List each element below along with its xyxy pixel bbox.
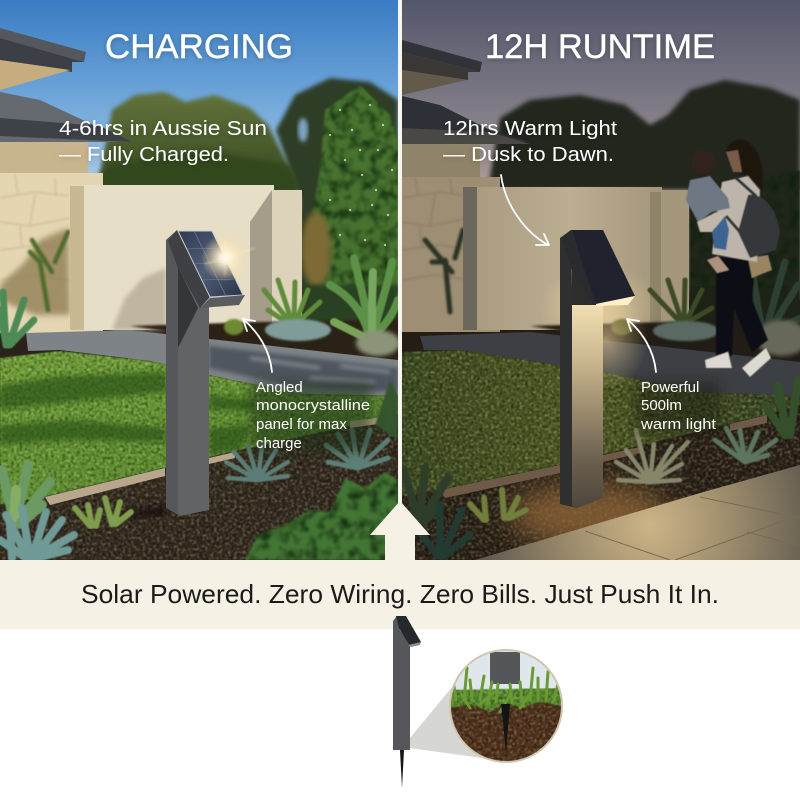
- lawn tree shadow bands: [0, 372, 255, 455]
- dusk post lit front: [572, 304, 603, 508]
- right mixed shrub: [356, 330, 400, 356]
- footpath: [26, 330, 398, 396]
- callout: panel description: Angled: [256, 379, 303, 396]
- warm glow beam: [564, 290, 648, 390]
- green ground shrub: [245, 472, 398, 560]
- path light dapples: [250, 358, 390, 382]
- mid hedge: [85, 150, 300, 190]
- silver plant: centre: [226, 446, 288, 480]
- text: runtime duration: — Dusk to Dawn.: [443, 144, 614, 166]
- inset grass blades: [453, 668, 558, 712]
- inset spike: [501, 704, 510, 752]
- dusk garden bed strip: [530, 318, 800, 365]
- child legs: [712, 216, 729, 250]
- child head: [691, 150, 715, 174]
- woman hair: [726, 140, 763, 190]
- callout: light description: Powerful: [641, 379, 699, 396]
- timber edging: [45, 418, 378, 505]
- callout: light description: 500lm: [641, 397, 682, 414]
- dusk mulch bed: [402, 405, 800, 560]
- fixture post front: [178, 268, 209, 516]
- fixture post left face: [166, 230, 180, 516]
- up arrow: [370, 501, 430, 561]
- dusk succulent: [470, 490, 526, 520]
- dusk stone joints: [402, 177, 470, 280]
- dusk bottom agave: [418, 505, 470, 556]
- ground spike: [400, 750, 404, 788]
- heading: charging: CHARGING: [105, 28, 293, 66]
- inset post: [490, 652, 520, 684]
- warm mulch glow: [510, 483, 670, 547]
- callout backing: [636, 382, 720, 432]
- shrub shadow on stone: [0, 228, 70, 315]
- dusk tree canopy: [488, 80, 800, 340]
- panel: runtime dusk scene: [402, 0, 800, 560]
- orange shrub: [301, 212, 331, 288]
- dusk silver low plant: [653, 321, 719, 341]
- small lamp solar head: [396, 616, 421, 646]
- small green plant: [224, 319, 244, 335]
- clump plant: [264, 280, 320, 322]
- left agave: [0, 292, 34, 345]
- rendered garden wall: [70, 185, 302, 330]
- stone wall: [0, 173, 103, 333]
- silver plant: right: [326, 430, 388, 468]
- bottom left silver agave: [0, 508, 74, 558]
- sky gap through tree: [298, 118, 308, 142]
- stone joints: [0, 175, 70, 280]
- panel: charging daytime scene: [0, 0, 400, 560]
- paved area: [475, 465, 800, 560]
- dusk sky: [402, 0, 800, 190]
- woman face: [726, 150, 742, 172]
- dusk silver plant: [715, 428, 776, 462]
- dusk hedge foliage: [689, 170, 800, 340]
- zoom cone: [410, 687, 482, 758]
- small product lamp: [393, 616, 421, 788]
- inset grass base: [450, 688, 562, 712]
- backpack strap: [726, 178, 756, 232]
- dusk house wall: [402, 142, 480, 182]
- succulent: [75, 498, 131, 526]
- dusk left agave: [404, 468, 448, 522]
- inset sky: [450, 650, 562, 690]
- inset ring: [449, 649, 563, 763]
- soft post shadow: [120, 505, 166, 518]
- tall dark tree: [273, 74, 398, 300]
- lit spiky plant: [616, 430, 688, 482]
- house roof lower: [0, 92, 132, 142]
- silver low plant: [265, 319, 331, 341]
- callout: panel description: monocrystalline: [256, 397, 370, 414]
- mulch bed: [0, 415, 398, 560]
- cream caption band: [0, 560, 800, 629]
- woman shoes: [705, 348, 771, 377]
- arrow: to fixture head: [501, 175, 549, 245]
- callout: panel description: panel for max: [256, 416, 347, 433]
- dusk timber edging: [440, 415, 767, 498]
- dusk garden wall: [463, 187, 689, 345]
- dusk post dark side: [560, 230, 577, 508]
- heading: 12h runtime: 12H RUNTIME: [485, 28, 715, 66]
- child body: [686, 176, 730, 222]
- solar panel: [178, 231, 243, 297]
- text: charging time: 4-6hrs in Aussie Sun: [59, 118, 267, 140]
- dusk lawn: [402, 350, 800, 497]
- woman torso: [712, 176, 760, 262]
- arrow: to solar panel: [243, 319, 272, 372]
- callout: panel description: charge: [256, 435, 302, 452]
- dusk roof upper: [402, 40, 482, 95]
- bottom left agave: [2, 465, 50, 524]
- sun flare on panel: [201, 234, 249, 282]
- shrub flower specks: [330, 105, 392, 245]
- dusk post upper face: [572, 268, 593, 305]
- child shoe: [707, 256, 729, 273]
- caption text: Solar Powered. Zero Wiring. Zero Bills. Just Push It In.: [81, 579, 719, 609]
- dusk ground base: [402, 300, 800, 560]
- soil and lawn base: [0, 300, 398, 560]
- path shadow dapples: [209, 346, 398, 392]
- dusk right edge plant: [765, 380, 798, 435]
- led light strip: [596, 296, 635, 306]
- text: runtime duration: 12hrs Warm Light: [443, 118, 617, 140]
- light fixture: runtime: [560, 230, 635, 508]
- dusk foliage behind plants: [689, 290, 800, 325]
- callout backing: [250, 382, 372, 450]
- inset: stake in soil: [449, 649, 563, 763]
- small dusk plant: [611, 319, 633, 335]
- fern by wall: [30, 232, 68, 310]
- sky: [0, 0, 398, 200]
- inset soil: [450, 698, 562, 762]
- flare rays: [205, 240, 255, 276]
- fixture head side: [168, 230, 210, 308]
- dusk fern by wall: [425, 230, 463, 312]
- cardigan tail: [748, 255, 772, 278]
- person carrying child: [686, 140, 780, 377]
- child trousers cream: [697, 212, 725, 232]
- small lamp post: [393, 616, 410, 750]
- foliage behind plants: [302, 285, 398, 325]
- flowering shrub: [312, 85, 398, 296]
- dusk solar panel: [571, 230, 635, 304]
- woman legs: [716, 257, 768, 356]
- small lamp strip: [408, 642, 421, 647]
- dusk mixed shrub: [756, 320, 800, 356]
- agave behind wall: [330, 258, 398, 336]
- distant tree canopy: [96, 92, 298, 195]
- right edge plant: [375, 380, 398, 440]
- paving joints: [585, 497, 800, 560]
- house wall: [0, 142, 88, 173]
- garden bed strip: [130, 319, 398, 346]
- arrow: to warm light: [627, 319, 656, 372]
- dusk stone wall: [402, 177, 500, 332]
- text: charging time: — Fully Charged.: [59, 144, 229, 166]
- dusk footpath: [420, 332, 800, 396]
- dusk roof lower: [402, 96, 530, 144]
- fixture head front: [200, 295, 245, 308]
- lawn: [0, 351, 398, 505]
- dusk head side: [561, 230, 597, 305]
- white divider: [398, 0, 402, 560]
- dusk agave: [742, 262, 800, 332]
- callout: light description: warm light: [640, 416, 717, 433]
- house roof upper: [0, 28, 86, 90]
- post shaded patch: [178, 267, 198, 348]
- backpack: [738, 195, 780, 258]
- light fixture: charging: [166, 230, 255, 516]
- dusk clump plant: [650, 280, 712, 322]
- solar cell lines: [187, 231, 236, 296]
